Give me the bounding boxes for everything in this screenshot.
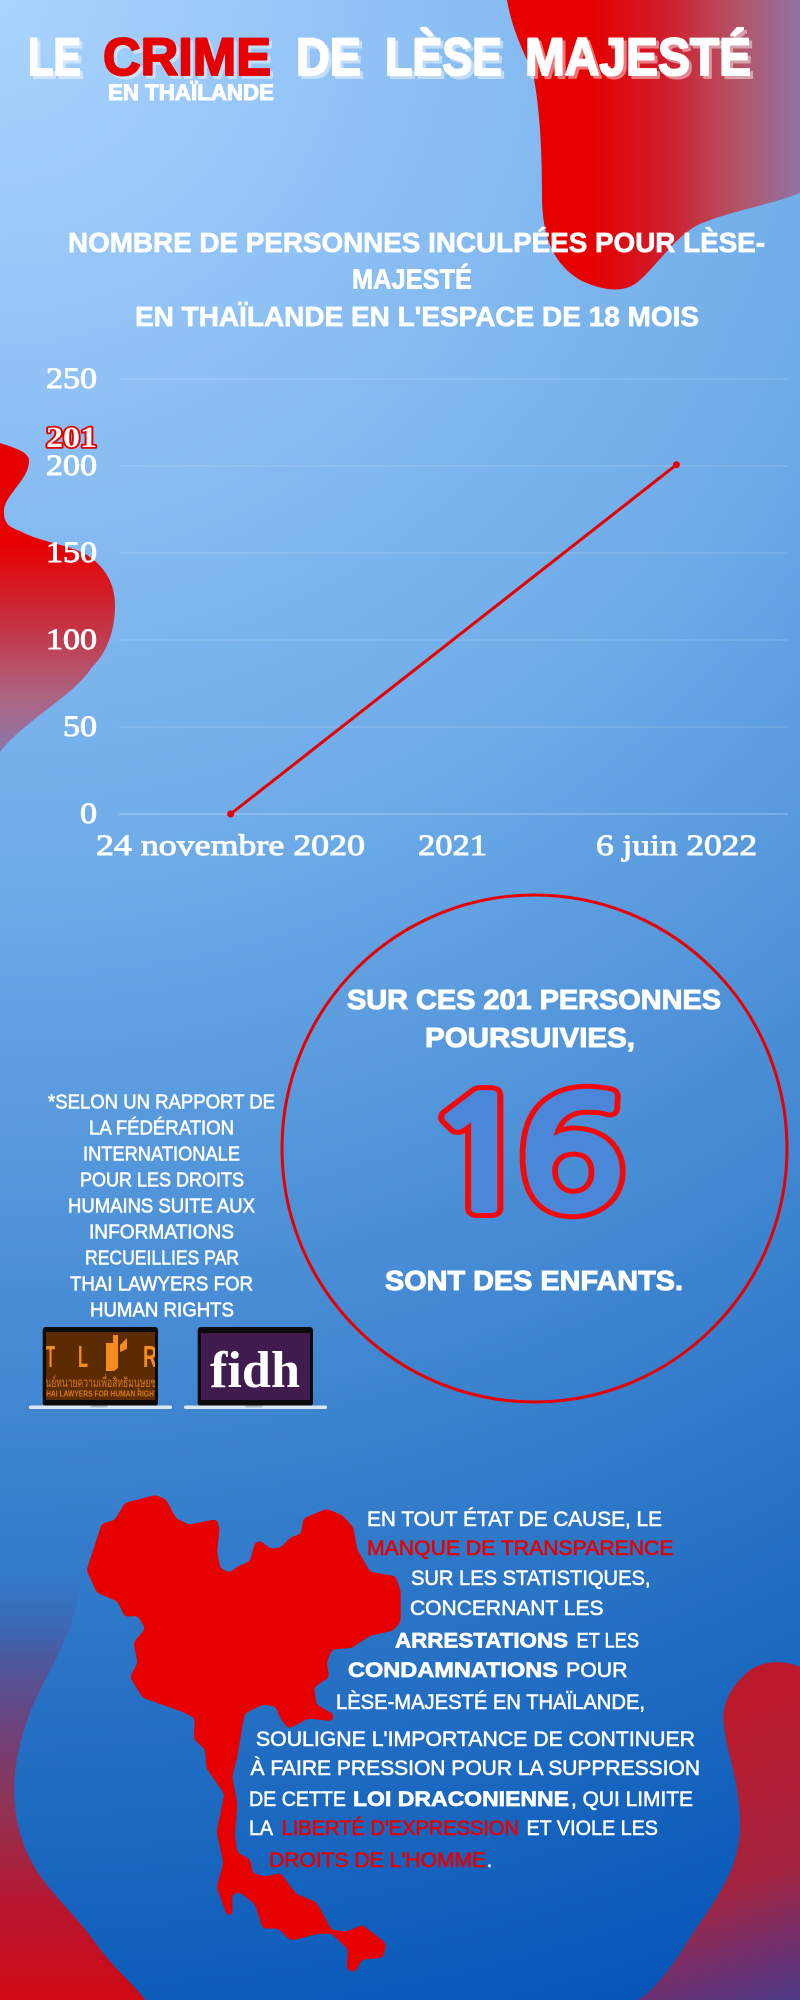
conclusion text: ET LES <box>576 1629 639 1653</box>
title main line: LÈSE <box>385 27 502 87</box>
title main line: CRIME <box>103 28 271 87</box>
highlighted value 201: 201 <box>46 421 97 454</box>
laptop: TLHR logo: ศูนย์ทนายความเพื่อสิทธิมนุษยชน <box>40 1374 162 1391</box>
y axis labels: 250 <box>46 362 97 395</box>
conclusion text: ET VIOLE LES <box>526 1816 658 1840</box>
x axis labels: 6 juin 2022 <box>596 829 757 862</box>
callout text bottom: SONT DES ENFANTS. <box>385 1265 683 1296</box>
conclusion text: SOULIGNE L'IMPORTANCE DE CONTINUER <box>256 1727 695 1751</box>
conclusion text: ARRESTATIONS <box>395 1629 568 1653</box>
x axis labels <box>96 829 757 862</box>
laptop: FIDH logo <box>184 1327 327 1409</box>
chart heading: NOMBRE DE PERSONNES INCULPÉES POUR LÈSE- <box>68 227 765 258</box>
y axis labels <box>46 362 97 830</box>
big number 16: 1 <box>423 1081 537 1234</box>
conclusion text: À FAIRE PRESSION POUR LA SUPPRESSION <box>250 1755 700 1780</box>
chart gridlines <box>119 379 788 814</box>
x axis labels: 2021 <box>418 829 487 862</box>
y axis labels: 0 <box>80 797 97 830</box>
data line <box>227 461 680 818</box>
source note: POUR LES DROITS <box>80 1169 244 1191</box>
title subtitle: EN THAÏLANDE <box>108 80 274 105</box>
conclusion text: LOI DRACONIENNE <box>353 1787 569 1811</box>
blob: top right red shape <box>505 0 800 289</box>
source note: HUMAINS SUITE AUX <box>68 1196 255 1218</box>
callout text top: POURSUIVIES, <box>425 1022 635 1053</box>
title main line: DE <box>296 28 361 87</box>
blob: bottom right red shape <box>630 1662 800 2000</box>
conclusion text: , QUI LIMITE <box>571 1787 693 1811</box>
source note: INTERNATIONALE <box>83 1143 240 1165</box>
source note <box>48 1092 275 1321</box>
source note: *SELON UN RAPPORT DE <box>48 1092 275 1114</box>
conclusion text: . <box>487 1848 492 1872</box>
blob: bottom left red shape <box>0 1540 145 2000</box>
laptop: TLHR logo <box>29 1327 172 1409</box>
conclusion text: LÈSE-MAJESTÉ EN THAÏLANDE, <box>336 1689 645 1714</box>
source note: LA FÉDÉRATION <box>89 1116 234 1140</box>
source note: RECUEILLIES PAR <box>85 1248 239 1270</box>
source note: HUMAN RIGHTS <box>90 1299 234 1321</box>
circle outline <box>282 895 787 1402</box>
laptop: TLHR logo: T <box>46 1339 55 1374</box>
source note: INFORMATIONS <box>89 1222 234 1244</box>
circle callout <box>282 895 787 1402</box>
conclusion text: EN TOUT ÉTAT DE CAUSE, LE <box>367 1506 662 1531</box>
callout text top <box>347 984 721 1053</box>
conclusion text: MANQUE DE TRANSPARENCE <box>367 1536 674 1560</box>
map of Thailand <box>87 1495 401 1972</box>
big number 16: 6 <box>517 1081 626 1234</box>
chart heading <box>68 227 765 332</box>
title main line: LE <box>28 28 81 87</box>
chart heading: MAJESTÉ <box>352 264 472 294</box>
laptop: TLHR logo: THAI LAWYERS FOR HUMAN RIGHT <box>42 1388 159 1398</box>
laptop: TLHR logo: L <box>78 1339 88 1374</box>
y axis labels: 50 <box>63 710 97 743</box>
y axis labels: 150 <box>46 536 97 569</box>
conclusion text: CONDAMNATIONS <box>348 1658 558 1682</box>
conclusion text: DE CETTE <box>249 1787 346 1811</box>
conclusion text <box>249 1506 700 1872</box>
source note: THAI LAWYERS FOR <box>70 1274 253 1296</box>
y axis labels: 100 <box>46 623 97 656</box>
conclusion text: CONCERNANT LES <box>410 1596 604 1620</box>
title main line <box>28 27 751 87</box>
conclusion text: POUR <box>566 1658 628 1682</box>
callout text top: SUR CES 201 PERSONNES <box>347 984 721 1015</box>
x axis labels: 24 novembre 2020 <box>96 829 365 862</box>
title main line: MAJESTÉ <box>525 27 751 87</box>
conclusion text: LA <box>249 1816 274 1840</box>
conclusion text: SUR LES STATISTIQUES, <box>411 1566 650 1590</box>
title <box>28 27 751 105</box>
chart heading: EN THAÏLANDE EN L'ESPACE DE 18 MOIS <box>135 301 699 332</box>
y axis labels: 200 <box>46 449 97 482</box>
laptop: FIDH logo: fidh <box>210 1342 300 1399</box>
laptop: TLHR logo: R <box>143 1339 157 1374</box>
conclusion text: LIBERTÉ D'EXPRESSION <box>282 1815 519 1840</box>
big number 16: 1 <box>423 1081 537 1234</box>
line chart <box>46 362 788 862</box>
big number 16 <box>423 1081 626 1234</box>
conclusion text: DROITS DE L'HOMME <box>269 1848 486 1872</box>
big number 16: 6 <box>517 1081 626 1234</box>
blob: left red shape <box>0 438 115 762</box>
